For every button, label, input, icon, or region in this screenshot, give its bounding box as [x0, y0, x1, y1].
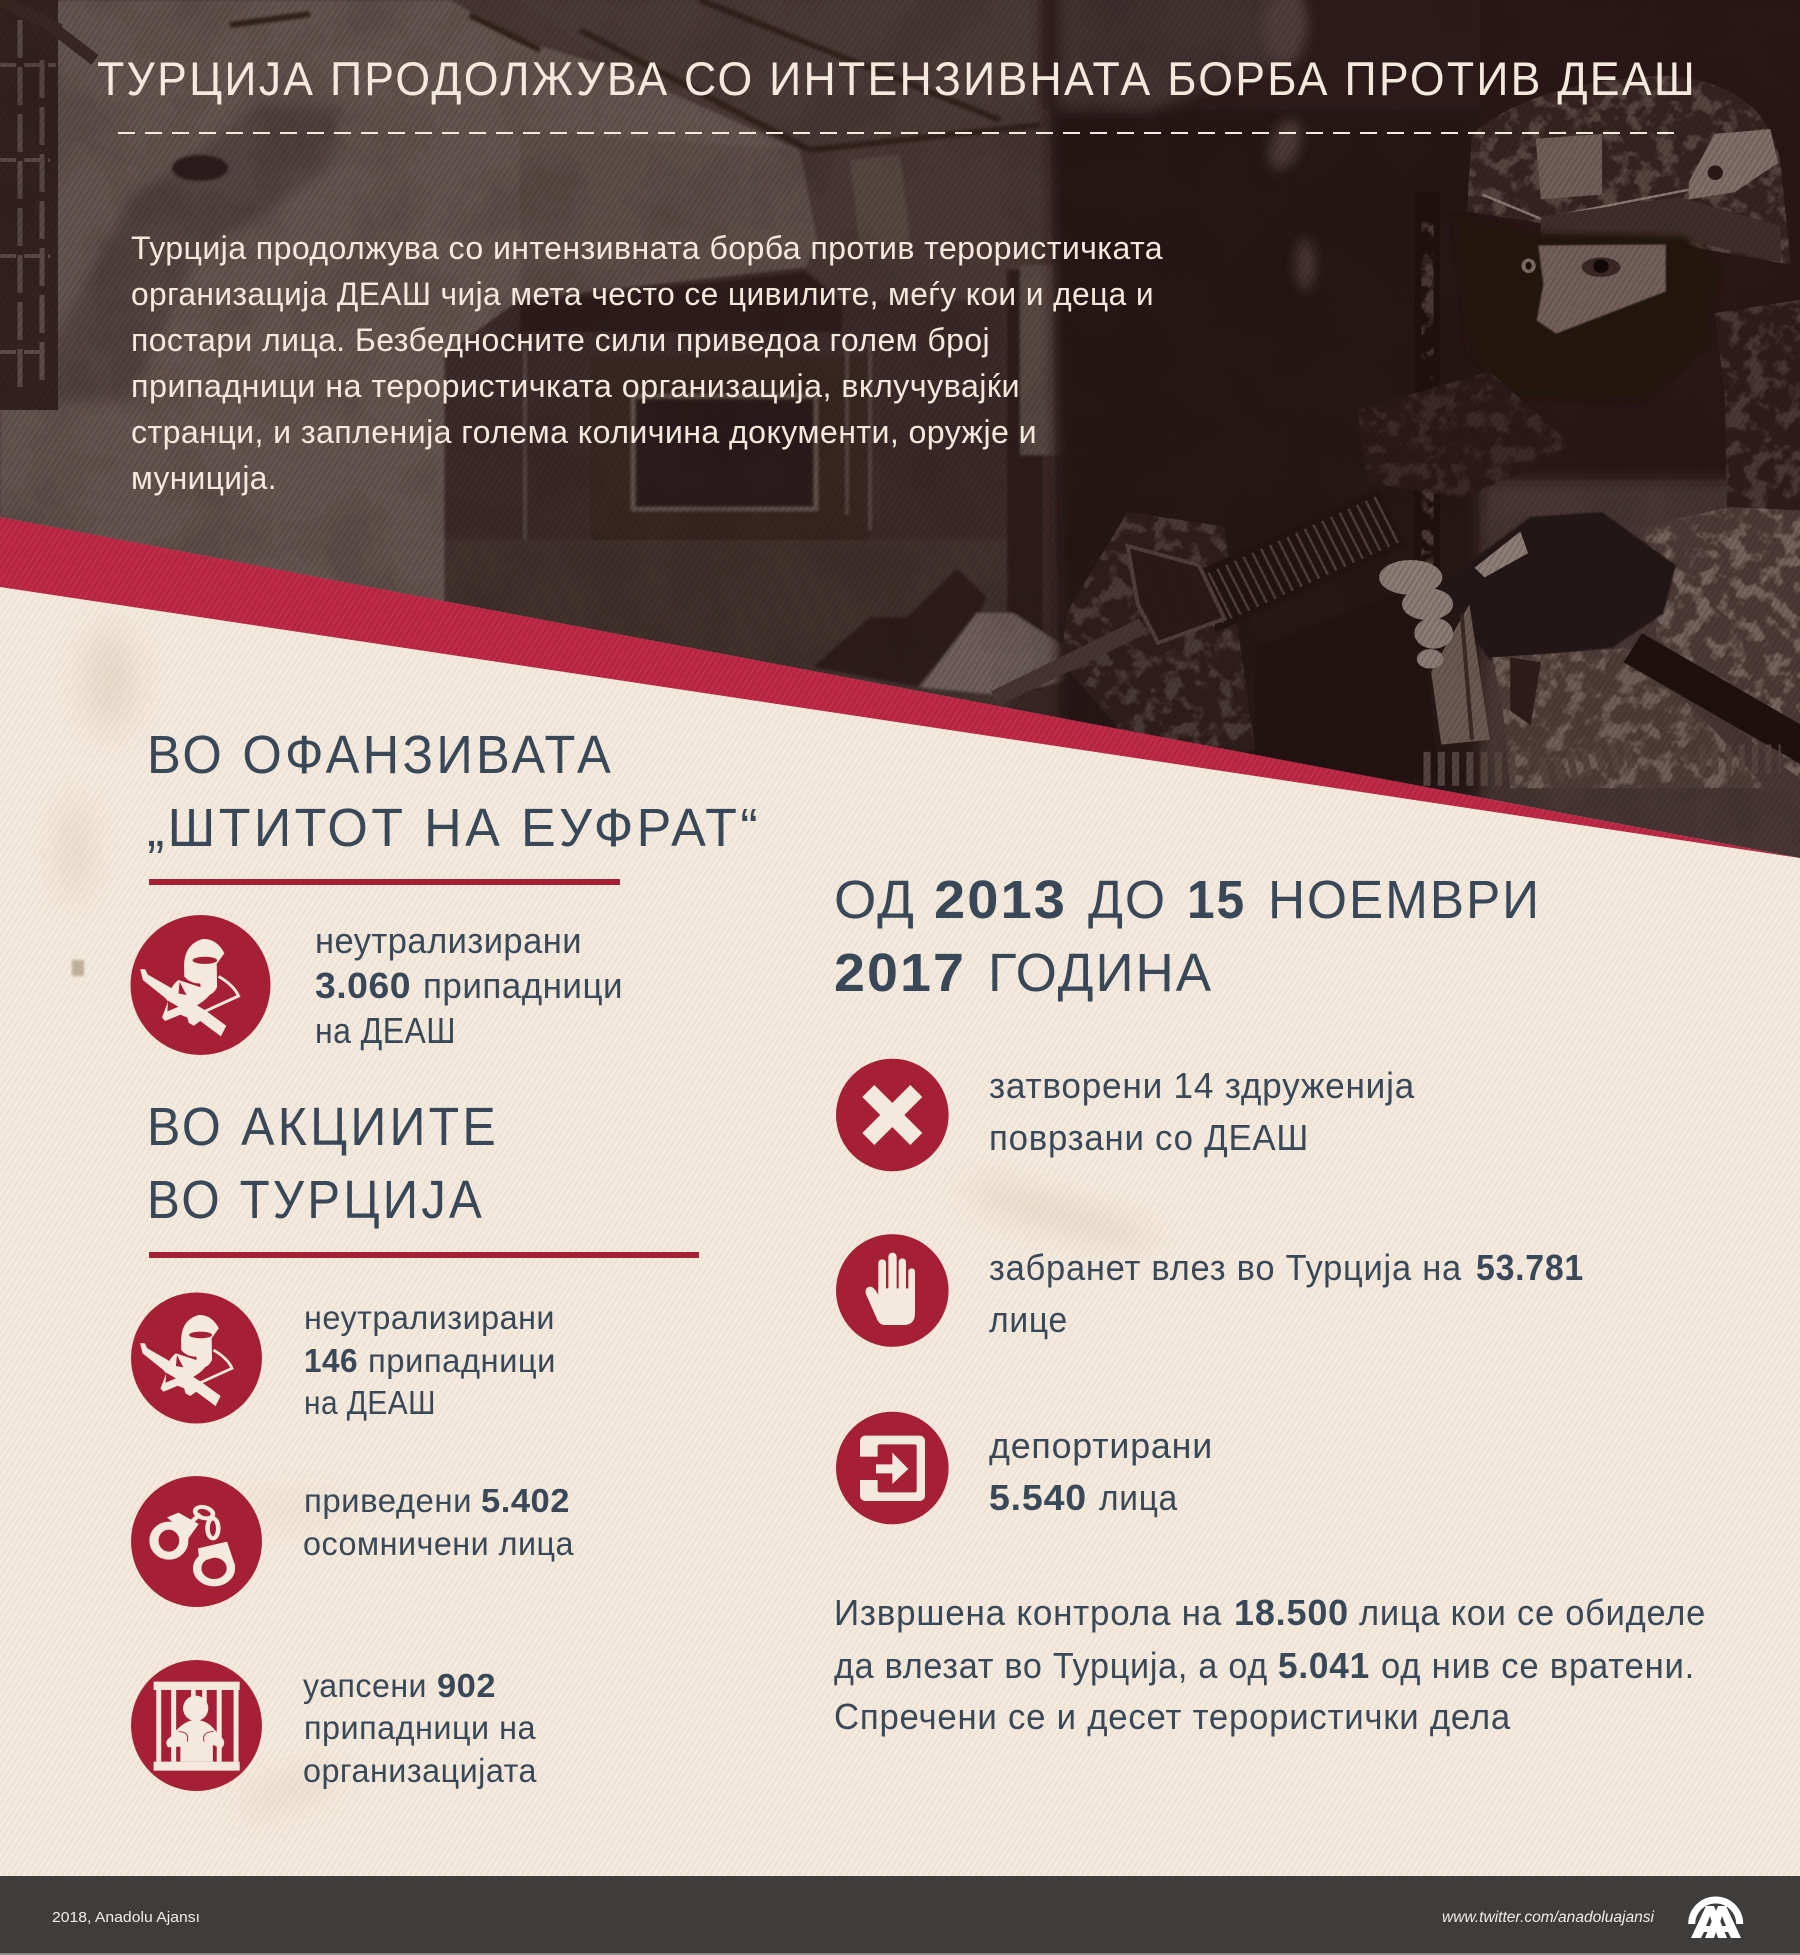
doorway	[444, 265, 1118, 729]
intro text block: постари лица. Безбедносните сили приведоа голем број	[131, 322, 990, 358]
icon circle: prisoner behind bars	[131, 1660, 262, 1791]
soldier	[995, 76, 1800, 803]
brick column	[0, 0, 95, 410]
text: neutralized 146: припадници	[368, 1342, 556, 1379]
heading: from 2013 to 15 November 2017: 15	[1187, 870, 1246, 930]
rule under Euphrates Shield heading	[149, 879, 620, 885]
lower body	[1492, 650, 1741, 788]
wall	[0, 0, 910, 601]
icon circle: deportation	[836, 1412, 949, 1524]
text: neutralized 3.060: 3.060	[315, 965, 411, 1006]
text: detained 5.402: осомничени лица	[303, 1525, 574, 1562]
heading: operations in Turkey: ВО АКЦИИТЕ	[147, 1097, 499, 1157]
heading: Euphrates Shield: „ШТИТОТ НА ЕУФРАТ“	[147, 798, 761, 858]
glove	[1471, 512, 1676, 660]
text: border control paragraph: лица кои се обиделе	[1359, 1592, 1706, 1633]
heading: operations in Turkey	[147, 1097, 499, 1230]
icon circle: entry ban	[836, 1234, 949, 1347]
rule under Turkey heading	[149, 1252, 699, 1258]
text: border control paragraph: 18.500	[1234, 1592, 1349, 1633]
icon: masked militant with rifle	[140, 1315, 232, 1406]
text: border control paragraph: Спречени се и десет терористички дела	[834, 1696, 1511, 1737]
text: detained 5.402: 5.402	[481, 1482, 570, 1519]
text: border control paragraph: Извршена контрола на	[834, 1592, 1222, 1633]
magazine	[1431, 604, 1490, 745]
text: entry ban 53.781: забранет влез во Турција на	[989, 1247, 1462, 1288]
intro text block	[131, 230, 1163, 496]
text: deported 5.540: лица	[1099, 1477, 1178, 1518]
intro text block: организација ДЕАШ чија мета често се цивилите, меѓу кои и деца и	[131, 276, 1154, 312]
icon: handcuffs	[154, 1505, 235, 1583]
icon: prisoner behind bars	[154, 1682, 240, 1771]
intro text block: странци, и запленија голема количина документи, оружје и	[131, 414, 1037, 450]
text: neutralized 3.060: неутрализирани	[315, 920, 582, 961]
text: border control paragraph: од нив се вратени.	[1381, 1645, 1695, 1686]
shoulders and arms	[1715, 316, 1800, 510]
heading: from 2013 to 15 November 2017: 2013	[934, 870, 1067, 930]
footer credit: 2018, Anadolu Ajansı	[52, 1909, 200, 1926]
text: entry ban 53.781: 53.781	[1476, 1247, 1584, 1288]
intro text block: припадници на терористичката организација, вклучувајќи	[131, 368, 1020, 404]
text: border control paragraph: да влезат во Турција, а од	[834, 1645, 1268, 1686]
logo: Anadolu Agency	[1691, 1900, 1741, 1938]
icon: exit arrow	[859, 1436, 925, 1501]
text: neutralized 3.060: припадници	[423, 965, 623, 1006]
icon circle: neutralized militants	[130, 915, 270, 1055]
icon: raised hand	[866, 1253, 915, 1325]
icon circle: closed associations	[836, 1059, 949, 1171]
face	[1537, 244, 1666, 334]
helmet	[1467, 76, 1791, 265]
red diagonal band	[0, 517, 1800, 858]
heading: from 2013 to 15 November 2017: НОЕМВРИ	[1268, 870, 1541, 930]
text: arrested 902: уапсени	[303, 1667, 427, 1704]
heading: from 2013 to 15 November 2017: ГОДИНА	[988, 943, 1213, 1003]
text: detained 5.402: приведени	[304, 1482, 472, 1519]
text: arrested 902: припадници на	[304, 1709, 536, 1746]
text: entry ban 53.781: лице	[989, 1299, 1068, 1340]
heading: operations in Turkey: ВО ТУРЦИЈА	[147, 1170, 485, 1230]
text: closed 14 associations: затворени 14 здруженија	[989, 1065, 1415, 1106]
dark interior and top right	[1040, 0, 1800, 800]
icon: cross	[868, 1091, 916, 1139]
text: arrested 902: 902	[437, 1667, 496, 1704]
text: neutralized 146: неутрализирани	[304, 1299, 555, 1336]
footer twitter link: www.twitter.com/anadoluajansi	[1442, 1909, 1655, 1926]
heading: from 2013 to 15 November 2017: ОД	[834, 870, 916, 930]
icon circle: handcuffs	[131, 1476, 262, 1607]
hand	[1379, 560, 1453, 669]
heading: Euphrates Shield: ВО ОФАНЗИВАТА	[147, 725, 614, 785]
heading: Euphrates Shield	[147, 725, 761, 858]
text: neutralized 3.060: на ДЕАШ	[315, 1010, 456, 1051]
intro text block: Турција продолжува со интензивната борба против терористичката	[131, 230, 1163, 266]
footer bar	[0, 1876, 1800, 1955]
text: deported 5.540: 5.540	[989, 1477, 1087, 1518]
dashed title rule	[118, 132, 1682, 134]
text: border control paragraph: 5.041	[1278, 1645, 1370, 1686]
icon circle: neutralized militants	[131, 1292, 262, 1424]
icon: masked militant with rifle	[140, 939, 239, 1036]
text: neutralized 146: 146	[304, 1342, 358, 1379]
text: deported 5.540: депортирани	[989, 1425, 1213, 1466]
text: neutralized 146: на ДЕАШ	[304, 1384, 436, 1421]
text: arrested 902: организацијата	[303, 1752, 537, 1789]
title: ТУРЦИЈА ПРОДОЛЖУВА СО ИНТЕНЗИВНАТА БОРБА ПРОТИВ ДЕАШ	[97, 52, 1697, 105]
heading: from 2013 to 15 November 2017: 2017	[834, 943, 966, 1003]
heading: from 2013 to 15 November 2017: ДО	[1088, 870, 1167, 930]
text: closed 14 associations: поврзани со ДЕАШ	[989, 1117, 1309, 1158]
mask	[1454, 216, 1719, 401]
rifle barrel	[1203, 557, 1237, 632]
intro text block: муниција.	[131, 460, 277, 496]
background photo: soldier in doorway	[0, 0, 1800, 900]
